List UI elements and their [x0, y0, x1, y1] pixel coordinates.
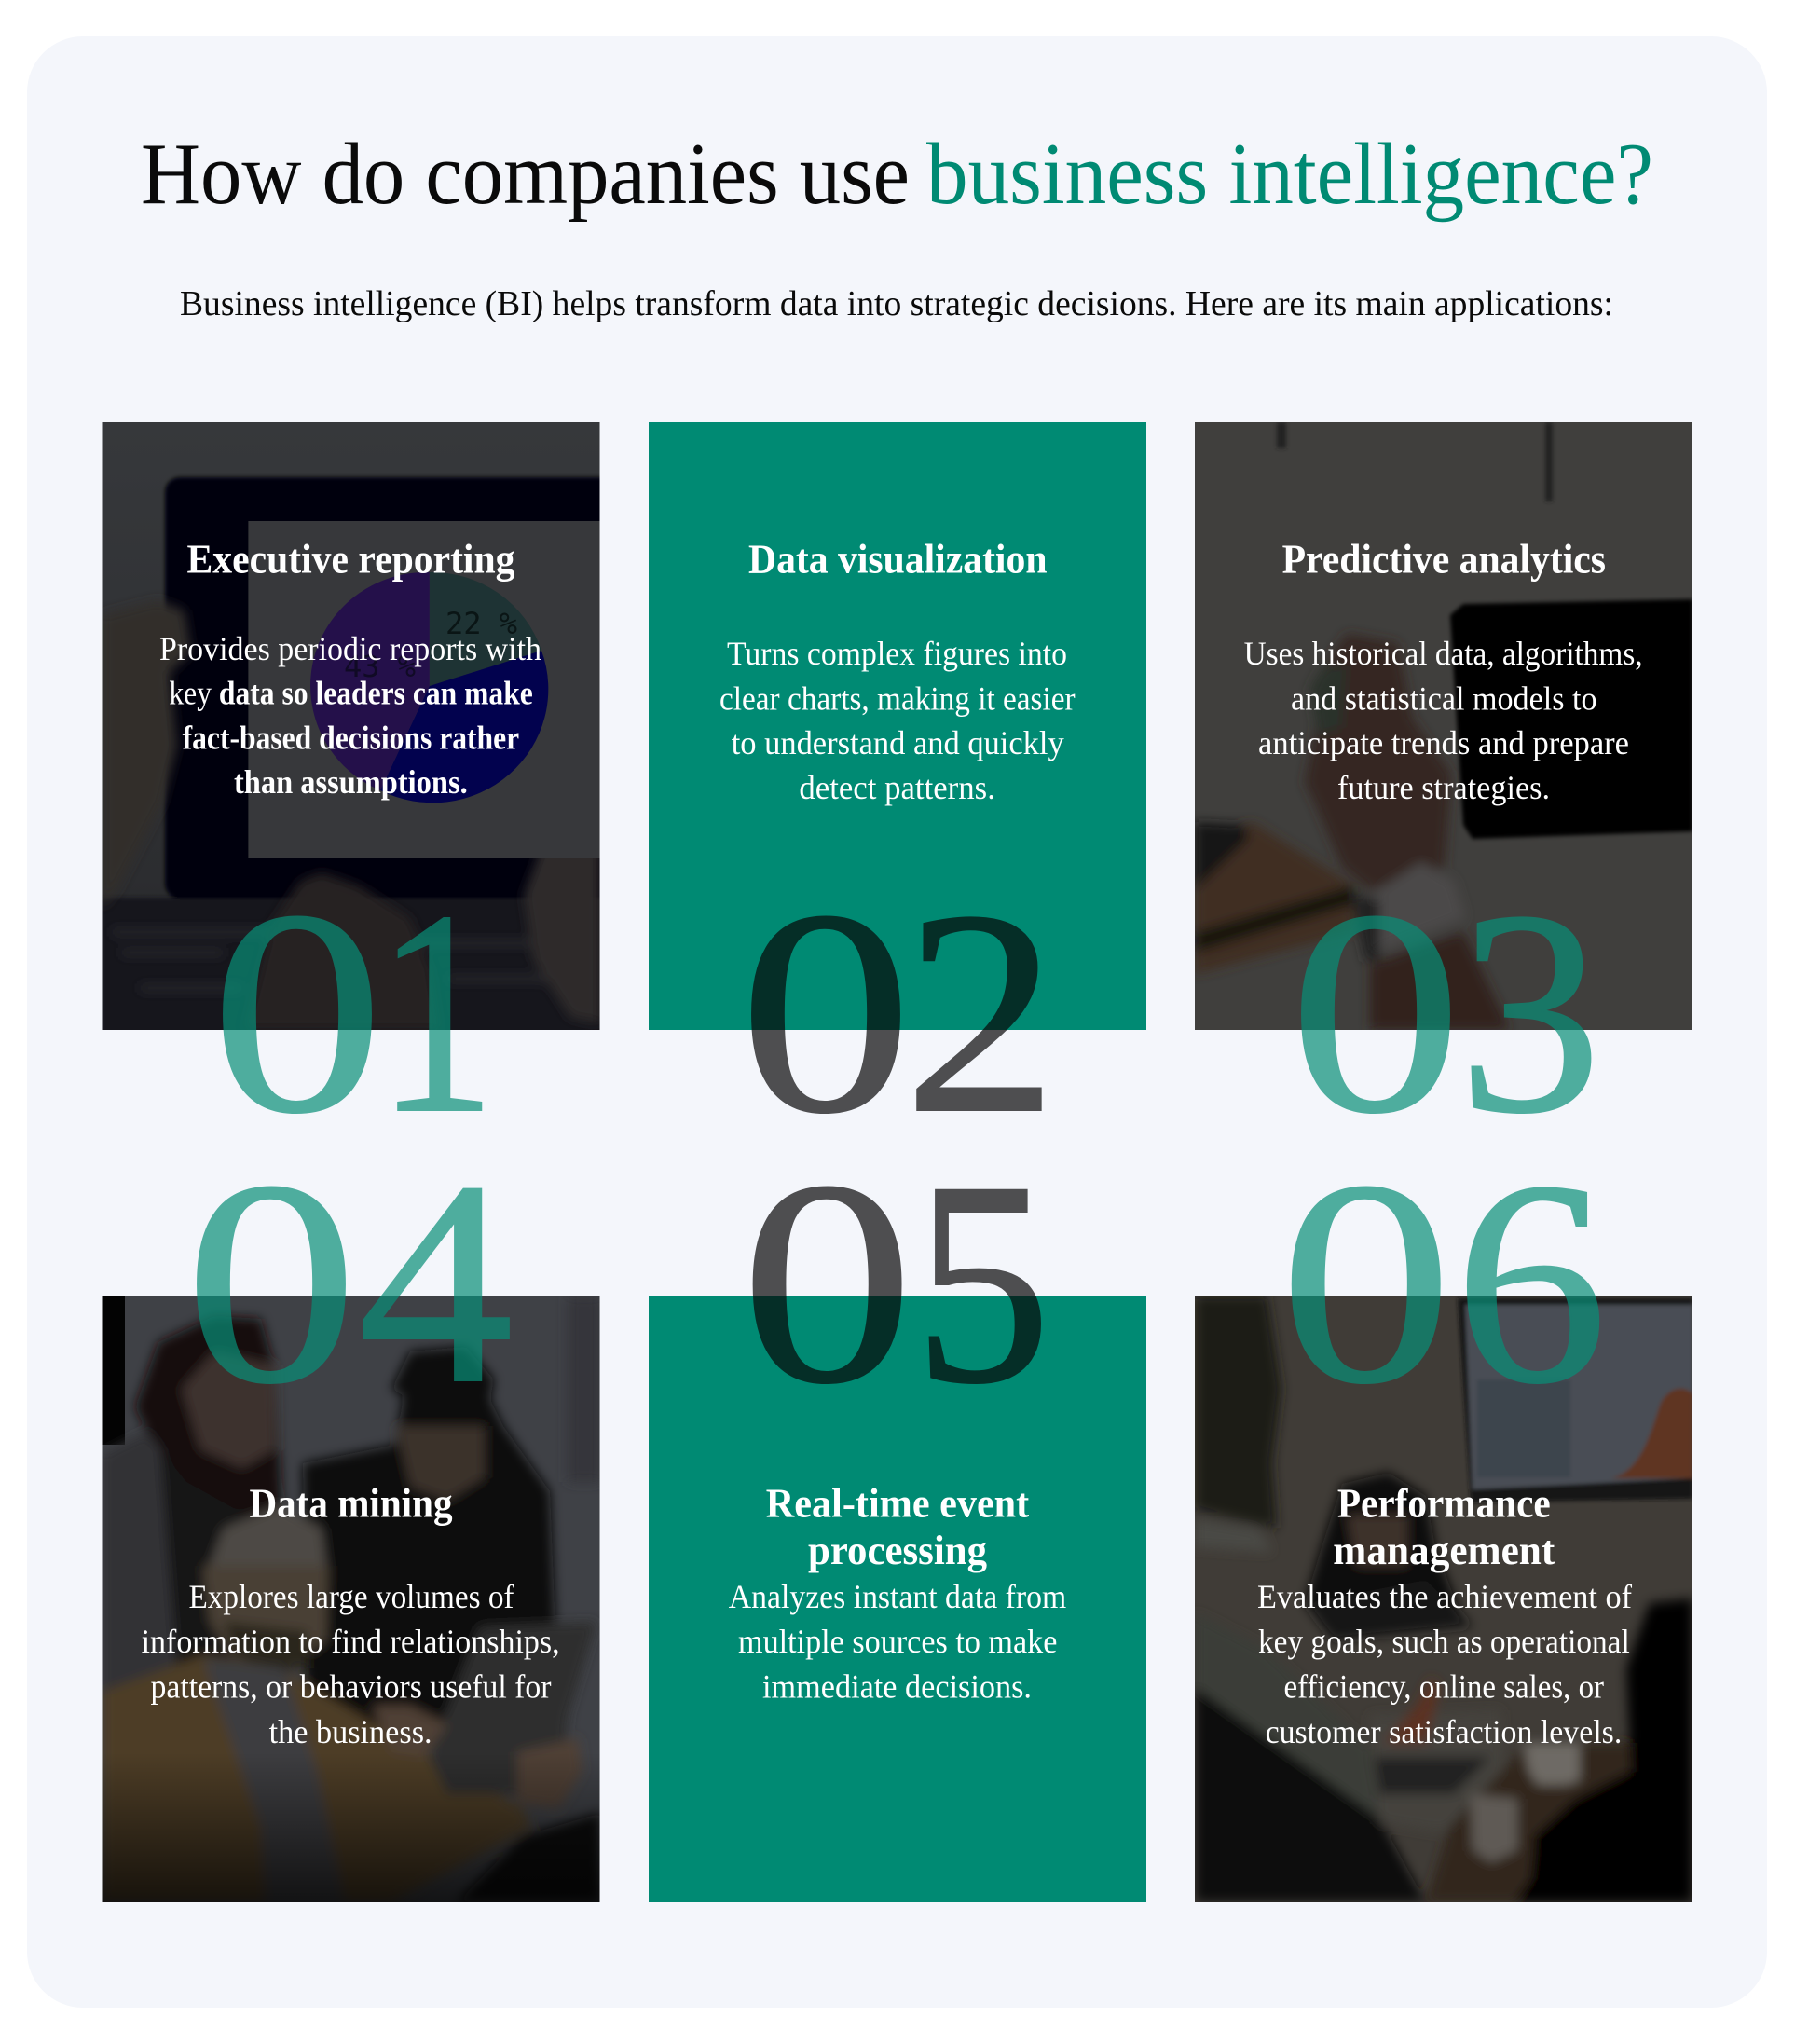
- description: immediate decisions.: [762, 1668, 1032, 1706]
- heading: Data visualization: [748, 537, 1048, 583]
- number 06: 0: [1280, 1122, 1453, 1444]
- description: [1244, 635, 1643, 806]
- card 01: Executive reporting: [103, 422, 600, 1114]
- title: How do companies use: [141, 126, 910, 223]
- description: Uses historical data, algorithms,: [1244, 635, 1643, 672]
- description: [719, 635, 1076, 806]
- description: Provides periodic reports with: [159, 630, 541, 667]
- pie chart: 43 %: [344, 649, 416, 684]
- description: detect patterns.: [799, 769, 995, 806]
- description: fact-based decisions rather: [183, 720, 519, 757]
- number 04: 0: [185, 1122, 358, 1444]
- heading: [766, 1481, 1030, 1573]
- description: Explores large volumes of: [188, 1578, 514, 1615]
- description: information to find relationships,: [142, 1623, 560, 1660]
- photo: three colleagues looking at a tablet: [102, 1296, 601, 1902]
- card 04: Data mining: [102, 1122, 601, 1902]
- tablet screen: [248, 521, 602, 858]
- description: [1257, 1578, 1632, 1750]
- number 02: 2: [904, 852, 1058, 1173]
- heading: Predictive analytics: [1282, 537, 1606, 583]
- heading: Data mining: [250, 1481, 453, 1527]
- number 01: 0: [211, 852, 384, 1173]
- card 05: Real-time event processing: [649, 1122, 1146, 1902]
- photo: meeting room with wall monitor: [1195, 1296, 1692, 1902]
- title: business intelligence?: [926, 126, 1653, 223]
- description: clear charts, making it easier: [719, 680, 1076, 718]
- heading: [1333, 1481, 1555, 1573]
- description: key goals, such as operational: [1258, 1623, 1630, 1660]
- description: Turns complex figures into: [727, 635, 1067, 672]
- description: efficiency, online sales, or: [1284, 1668, 1604, 1706]
- number 03: 3: [1459, 852, 1601, 1173]
- card 03: Predictive analytics: [1195, 422, 1692, 1173]
- subtitle: Business intelligence (BI) helps transform data into strategic decisions. Here are its main applications:: [180, 284, 1613, 323]
- heading: Performance: [1337, 1481, 1551, 1527]
- pie chart: 22 %: [445, 606, 517, 641]
- card 06: Performance management: [1195, 1122, 1692, 1902]
- description: [159, 630, 541, 801]
- heading: Executive reporting: [186, 537, 514, 583]
- description: to understand and quickly: [732, 724, 1064, 761]
- card 02: Data visualization: [649, 422, 1146, 1173]
- description: [142, 1578, 560, 1750]
- description: patterns, or behaviors useful for: [151, 1668, 552, 1706]
- description: multiple sources to make: [738, 1623, 1057, 1660]
- number 03: 0: [1289, 852, 1462, 1173]
- photo: tablet with pie chart: [103, 422, 600, 1030]
- photo: hand, tablet and notebook on a desk: [1195, 422, 1692, 1030]
- description: than assumptions.: [234, 763, 468, 801]
- description: the business.: [269, 1713, 432, 1750]
- pie chart: [310, 572, 548, 803]
- number 02: 0: [739, 852, 912, 1173]
- heading: management: [1333, 1528, 1555, 1573]
- description: anticipate trends and prepare: [1258, 724, 1629, 761]
- number 01: 1: [377, 852, 496, 1173]
- green panel: [649, 422, 1146, 1030]
- description: and statistical models to: [1291, 680, 1597, 718]
- description: [729, 1578, 1066, 1706]
- description: customer satisfaction levels.: [1266, 1713, 1622, 1750]
- number 05: 5: [913, 1122, 1051, 1444]
- heading: Real-time event: [766, 1481, 1030, 1527]
- description: key data so leaders can make: [169, 675, 533, 712]
- number 06: 6: [1455, 1122, 1608, 1444]
- heading: processing: [808, 1528, 987, 1573]
- green panel: [649, 1296, 1146, 1902]
- description: future strategies.: [1337, 769, 1550, 806]
- description: Evaluates the achievement of: [1257, 1578, 1632, 1615]
- number 04: 4: [358, 1122, 514, 1444]
- description: Analyzes instant data from: [729, 1578, 1066, 1615]
- number 05: 0: [741, 1122, 913, 1444]
